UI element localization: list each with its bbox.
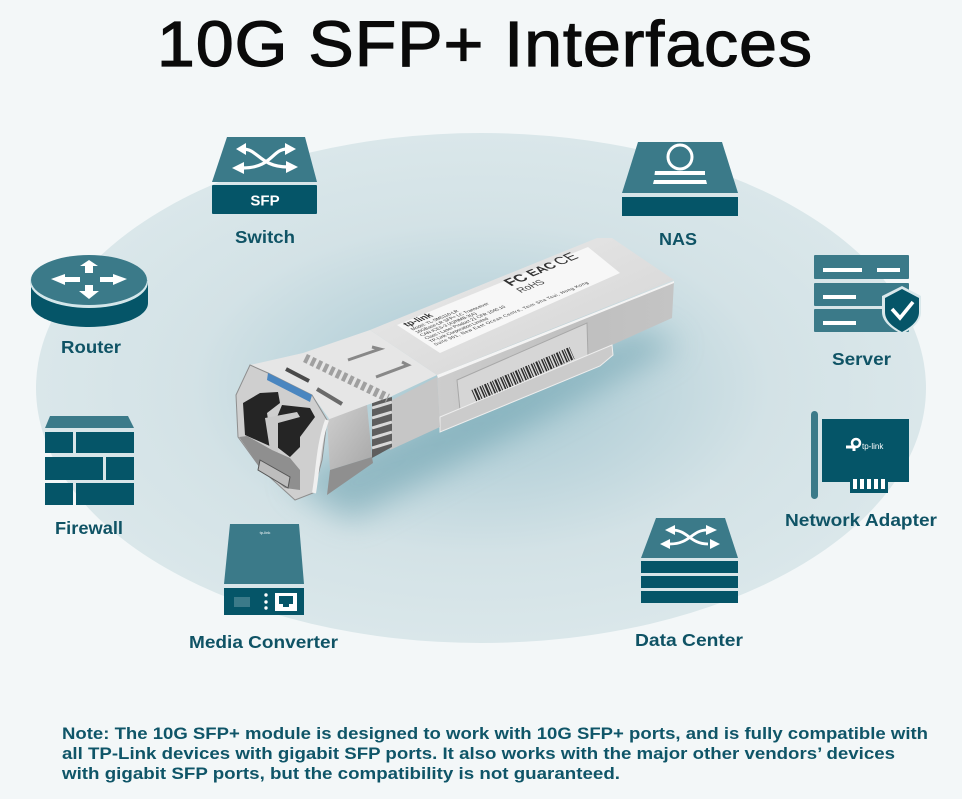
latch	[440, 345, 613, 432]
front shroud	[327, 405, 372, 470]
label: server: Server	[832, 349, 891, 369]
background ellipse	[36, 133, 926, 643]
bail top	[250, 330, 437, 420]
label sticker: RoHS	[514, 278, 548, 295]
mid body	[390, 377, 440, 450]
icon: network adapter	[811, 411, 909, 499]
icon: server	[814, 255, 921, 334]
icon: network adapter: tp-link	[862, 442, 884, 451]
label sticker: TP-Link Corporation Limited	[428, 317, 491, 344]
label sticker: CE	[549, 250, 583, 268]
label: network adapter: Network Adapter	[785, 510, 937, 530]
front ring	[236, 365, 327, 500]
barcode	[474, 353, 572, 396]
label: router: Router	[61, 337, 121, 357]
label sticker: Class I Laser Product 21 CFR 1040.10	[423, 305, 508, 341]
icon: data center	[641, 518, 738, 603]
ribs	[372, 397, 392, 458]
icon: switch	[212, 137, 317, 214]
label sticker: tp-link	[401, 311, 437, 329]
label: switch: Switch	[235, 227, 295, 247]
barcode recess	[457, 323, 588, 410]
module side face	[437, 281, 674, 432]
label sticker: EAC	[522, 260, 561, 278]
label sticker: CAN ICES-3 (A)/NMB-3(A)	[419, 312, 479, 338]
module shadow	[290, 330, 680, 520]
icon: NAS	[622, 142, 738, 216]
icon: media converter: tp-link	[260, 530, 270, 535]
label sticker	[397, 247, 620, 353]
icon: router	[30, 255, 148, 327]
label: data center: Data Center	[635, 630, 743, 650]
note: Note: The 10G SFP+ module is designed to work with 10G SFP+ ports, and is fully compatible with	[62, 724, 928, 743]
label sticker: Model: TL-SM5110-LR	[409, 309, 461, 332]
SFP+ module	[236, 238, 680, 520]
label: media converter: Media Converter	[189, 632, 338, 652]
blue strip	[267, 373, 312, 402]
label: NAS: NAS	[659, 229, 697, 249]
icon: switch: SFP	[250, 192, 280, 210]
note: with gigabit SFP ports, but the compatibility is not guaranteed.	[61, 764, 620, 783]
note	[61, 724, 928, 783]
icon: firewall	[45, 416, 134, 505]
fiber ports	[239, 392, 315, 490]
title: 10G SFP+ Interfaces	[157, 8, 813, 80]
label sticker: Suite 901, New East Ocean Centre, Tsim Sha Tsui, Hong Kong	[433, 281, 591, 347]
label sticker: FC	[500, 272, 533, 289]
icon: media converter	[224, 524, 304, 615]
note: all TP-Link devices with gigabit SFP ports. It also works with the major other vendors’ devices	[62, 744, 895, 763]
label sticker: 10GBase-LR SFP+ LC Transceiver	[414, 302, 491, 335]
module top face	[370, 238, 674, 375]
label: firewall: Firewall	[55, 518, 123, 538]
